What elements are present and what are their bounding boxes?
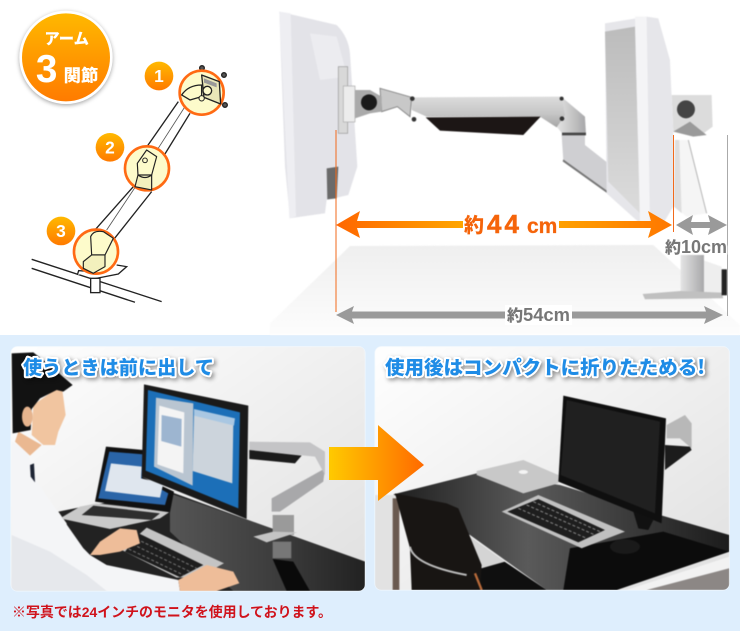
badge: arm 3 joints [21,12,111,103]
arrow: about 10 cm: 10cm [681,237,727,257]
number badge 2 [96,133,124,162]
arrow: about 44 cm: 44 [487,209,522,239]
number badge 2: 2 [105,137,115,157]
arm [380,88,608,194]
number badge 1: 1 [154,66,164,86]
right stand [643,140,727,299]
desk [393,473,729,590]
badge: arm 3 joints: 3 [36,48,57,91]
left monitor [279,12,382,218]
arrow between photos [329,425,424,501]
photo: arm extended in use [11,347,365,591]
heading: after use: 使用後はコンパクトに折りたためる! [385,353,705,380]
arrow: about 54 cm [336,302,723,326]
side view of monitor arm, extended and folded [270,12,740,335]
joint 3 [74,230,118,274]
desk [58,492,365,591]
joint 1 [180,71,224,115]
lower background panel [0,335,740,631]
monitor [558,396,666,530]
number badge 1 [145,62,173,90]
photo: arm folded away [375,347,729,590]
number badge 3: 3 [56,221,66,241]
arrow: about 44 cm [336,209,672,239]
person [12,352,239,591]
folded arm [665,415,692,470]
measure lines [336,130,728,316]
arrow: about 10 cm: 約 [665,234,681,258]
large monitor [142,384,248,519]
laptop [60,447,174,529]
right monitor and joint [605,17,713,223]
number badge 3 [47,217,75,245]
arrow: about 44 cm: cm [527,215,557,238]
keyboard [122,527,224,578]
arrow: about 44 cm: 約 [464,209,484,238]
chair [395,493,482,590]
arrow: about 10 cm [665,215,727,258]
heading: in use: 使うときは前に出して [23,353,214,380]
keyboard [502,495,625,548]
joint 2 [125,146,169,190]
arm line diagram with numbered joints [32,62,227,302]
mouse [610,539,640,554]
badge: arm 3 joints: 関節 [64,61,98,86]
arrow: about 54 cm: 54cm [523,305,570,325]
badge: arm 3 joints: アーム [44,27,89,49]
footnote: ※写真では24インチのモニタを使用しております。 [12,604,332,620]
closed laptop [477,460,558,493]
arrow: about 54 cm: 約 [507,302,523,326]
arm [249,442,325,591]
